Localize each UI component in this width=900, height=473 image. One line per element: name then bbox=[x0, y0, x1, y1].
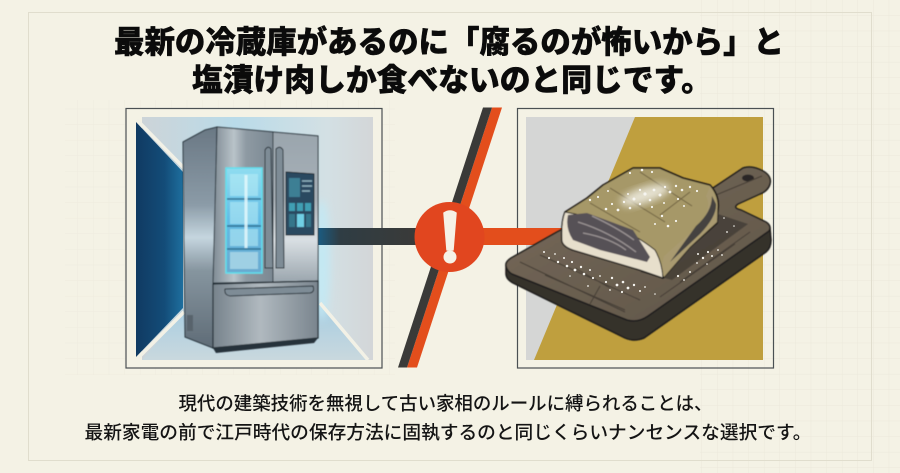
icon: salted pork block bbox=[562, 168, 718, 278]
diagonal dark and orange divider bbox=[398, 108, 502, 368]
door handles bbox=[225, 147, 314, 296]
connector bar: meat side bbox=[480, 228, 565, 245]
title bbox=[114, 25, 784, 98]
panel: salted meat backdrop bbox=[518, 108, 774, 368]
connector bar: refrigerator side bbox=[318, 228, 418, 245]
panel: refrigerator backdrop bbox=[126, 108, 382, 368]
meat shadow bbox=[640, 214, 748, 280]
caption text: 現代の建築技術を無視して古い家相のルールに縛られることは、 bbox=[178, 393, 712, 414]
smart touch screen bbox=[286, 172, 314, 235]
icon: warning exclamation circle bbox=[414, 202, 484, 272]
board wood grain bbox=[520, 176, 762, 312]
caption text bbox=[84, 393, 812, 443]
icon: wooden cutting board bbox=[506, 167, 771, 340]
title: 最新の冷蔵庫があるのに「腐るのが怖いから」と bbox=[114, 25, 784, 60]
title: 塩漬け肉しか食べないのと同じです。 bbox=[192, 63, 712, 98]
icon: refrigerator bbox=[183, 127, 318, 353]
caption text: 最新家電の前で江戸時代の保存方法に固執するのと同じくらいナンセンスな選択です。 bbox=[84, 422, 812, 443]
glowing window bbox=[226, 168, 262, 273]
coarse salt crystals bbox=[543, 169, 735, 295]
